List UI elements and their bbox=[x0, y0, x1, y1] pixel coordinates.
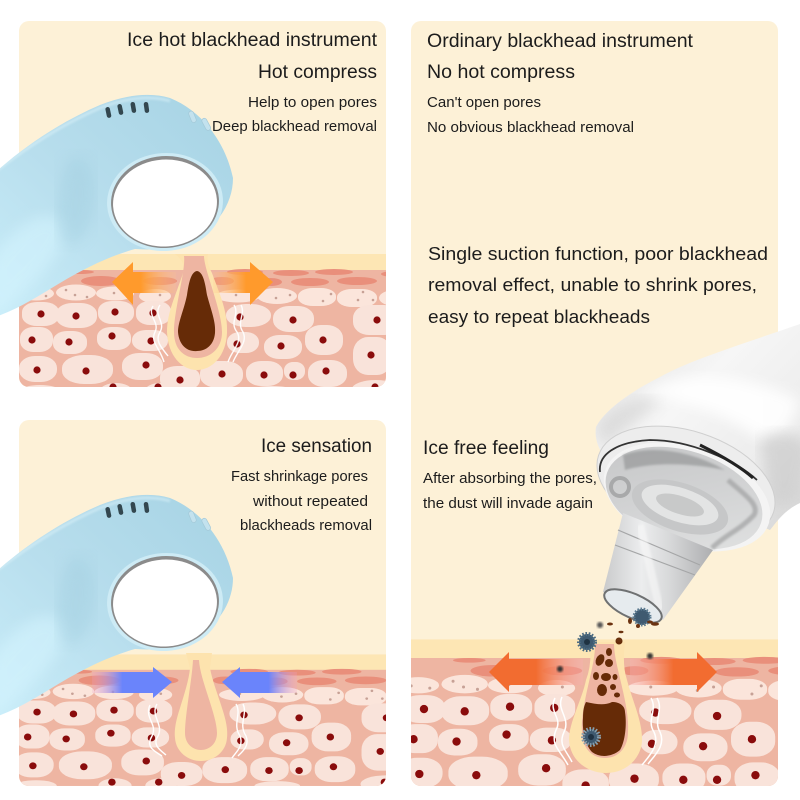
heading: ordinary: No obvious blackhead removal bbox=[427, 120, 634, 136]
chrome ring bbox=[600, 440, 757, 480]
blue arrow left bbox=[222, 667, 297, 698]
heading: ice hot: Help to open pores bbox=[248, 95, 377, 111]
heading: ice sensation: blackheads removal bbox=[240, 518, 372, 534]
closed pore bbox=[175, 653, 227, 761]
heat waves bbox=[148, 704, 247, 758]
heat waves bbox=[553, 697, 662, 765]
text: ice free feeling bbox=[423, 438, 597, 512]
text: single suction: removal effect, unable to shrink pores, bbox=[428, 274, 757, 295]
heading: ice sensation: without repeated bbox=[252, 494, 368, 510]
blue arrow right bbox=[92, 667, 172, 698]
heat waves bbox=[151, 305, 244, 362]
heading: ice hot: Deep blackhead removal bbox=[212, 119, 377, 135]
heading: ordinary: Ordinary blackhead instrument bbox=[427, 31, 694, 52]
tip bbox=[600, 582, 666, 630]
pore with debris and bacteria bbox=[569, 638, 642, 773]
open pore with blackhead bbox=[167, 254, 227, 370]
panel: ice hot compress bbox=[0, 21, 386, 387]
heading: ice sensation: Ice sensation bbox=[261, 436, 372, 457]
heading: ice sensation bbox=[231, 436, 372, 534]
orange arrow left bbox=[112, 262, 176, 305]
suction cone bbox=[603, 513, 713, 620]
heading: ice hot: Hot compress bbox=[258, 62, 377, 83]
text: single suction bbox=[428, 243, 768, 327]
text: single suction: easy to repeat blackheads bbox=[428, 306, 650, 327]
heading: ordinary bbox=[427, 31, 694, 136]
white suction device bbox=[582, 324, 800, 630]
heading: ordinary: No hot compress bbox=[427, 62, 575, 83]
icon: blue device bbox=[0, 495, 233, 720]
red arrow right bbox=[630, 652, 717, 692]
heading: ice hot bbox=[127, 30, 378, 135]
text: ice free feeling: After absorbing the pores, bbox=[423, 471, 597, 487]
skin cross section bbox=[19, 654, 386, 786]
skin cross section bbox=[19, 254, 386, 387]
text: single suction: Single suction function, poor blackhead bbox=[428, 243, 768, 264]
panel: ice sensation bbox=[0, 420, 386, 786]
bacteria and dust bbox=[557, 609, 659, 745]
text: ice free feeling: the dust will invade again bbox=[423, 496, 593, 512]
text: ice free feeling: Ice free feeling bbox=[423, 438, 549, 459]
panel: ordinary instrument bbox=[411, 21, 800, 786]
orange arrow right bbox=[213, 262, 273, 305]
heading: ordinary: Can't open pores bbox=[427, 95, 541, 111]
neck rings bbox=[625, 469, 735, 545]
icon: blue device bbox=[0, 95, 233, 320]
skin cross section bbox=[411, 640, 778, 786]
translucent dome bbox=[592, 428, 776, 568]
heading: ice sensation: Fast shrinkage pores bbox=[231, 469, 368, 485]
heading: ice hot: Ice hot blackhead instrument bbox=[127, 30, 378, 51]
red arrow left bbox=[489, 652, 583, 692]
flange bbox=[582, 405, 790, 563]
